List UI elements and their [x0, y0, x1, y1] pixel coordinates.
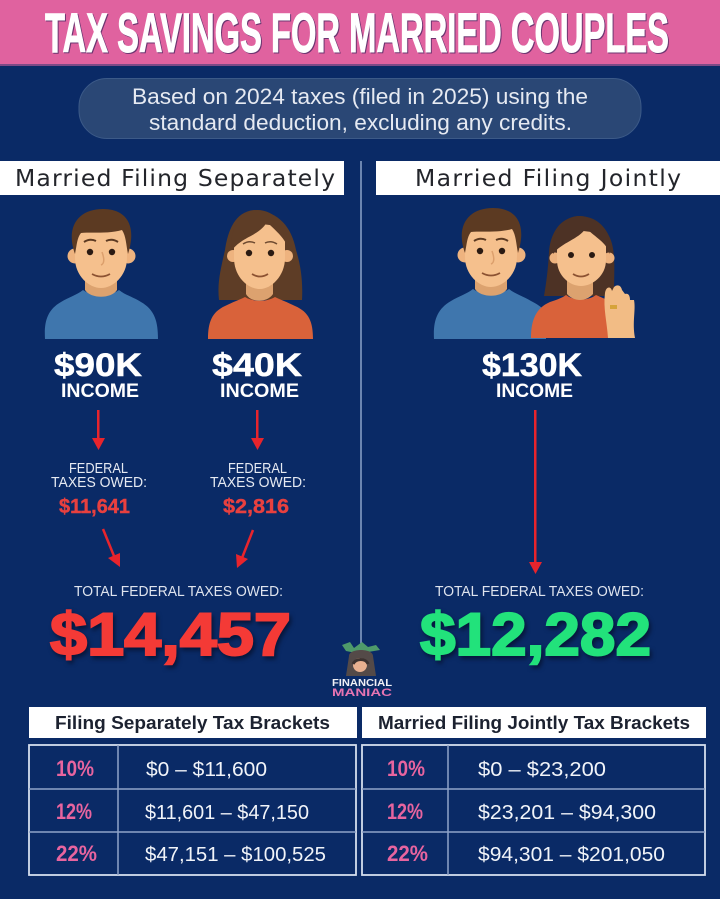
logo: financial maniac: FINANCIAL: [332, 677, 393, 689]
subtitle pill: Based on 2024 taxes (filed in 2025) using the: [132, 84, 588, 109]
table: separately brackets: 22%: [56, 841, 97, 866]
heading: married filing separately: Married Filing Separately: [15, 164, 335, 192]
logo: financial maniac: MANIAC: [332, 687, 392, 699]
heading: married filing jointly tax brackets: Married Filing Jointly Tax Brackets: [378, 712, 690, 733]
income: $40K: [212, 347, 302, 402]
arrow: woman tax to total: [236, 530, 253, 568]
federal taxes owed: $11,641: [51, 461, 147, 518]
table: jointly brackets: 10%: [387, 756, 425, 781]
federal taxes owed: $2,816: $2,816: [223, 496, 289, 518]
income: $40K: $40K: [212, 347, 302, 383]
table: separately brackets: $11,601 – $47,150: [145, 801, 309, 824]
table: separately brackets: $0 – $11,600: [146, 758, 267, 781]
federal taxes owed: $11,641: FEDERAL: [69, 461, 128, 477]
heading: married filing jointly: [376, 161, 720, 195]
table: separately brackets: [29, 745, 356, 875]
icon: couple: [434, 208, 635, 339]
arrow: woman income to tax: [251, 410, 264, 450]
icon: man: [45, 209, 158, 339]
table: jointly brackets: $23,201 – $94,300: [478, 801, 656, 824]
arrow: man tax to total: [103, 529, 120, 567]
arrow: joint income to total: [529, 410, 542, 574]
total taxes: separately: $14,457: [50, 601, 291, 668]
header banner: [0, 0, 720, 66]
table: jointly brackets: $0 – $23,200: [478, 758, 606, 781]
heading: filing separately tax brackets: Filing Separately Tax Brackets: [55, 712, 330, 733]
federal taxes owed: $11,641: TAXES OWED:: [51, 475, 147, 491]
federal taxes owed: $2,816: FEDERAL: [228, 461, 287, 477]
heading: married filing jointly: Married Filing Jointly: [415, 164, 681, 192]
table: separately brackets: 10%: [56, 756, 94, 781]
subtitle pill: [79, 78, 641, 138]
income: $130K: $130K: [482, 347, 582, 383]
table: jointly brackets: $94,301 – $201,050: [478, 843, 665, 866]
income: $90K: $90K: [54, 347, 142, 383]
heading: married filing jointly tax brackets: [362, 707, 706, 738]
income: $130K: [482, 347, 582, 402]
total taxes: separately: TOTAL FEDERAL TAXES OWED:: [74, 584, 283, 600]
income: $40K: INCOME: [220, 381, 299, 402]
income: $90K: [54, 347, 142, 402]
icon: woman: [208, 210, 313, 339]
heading: filing separately tax brackets: [29, 707, 357, 738]
table: jointly brackets: 22%: [387, 841, 428, 866]
federal taxes owed: $2,816: TAXES OWED:: [210, 475, 306, 491]
total taxes: jointly: $12,282: [420, 601, 651, 668]
table: separately brackets: $47,151 – $100,525: [145, 843, 326, 866]
arrow: man income to tax: [92, 410, 105, 450]
total taxes: jointly: TOTAL FEDERAL TAXES OWED:: [435, 584, 644, 600]
federal taxes owed: $11,641: $11,641: [59, 496, 130, 518]
table: jointly brackets: 12%: [387, 799, 423, 824]
income: $90K: INCOME: [61, 381, 139, 402]
income: $130K: INCOME: [496, 381, 573, 402]
federal taxes owed: $2,816: [210, 461, 306, 518]
subtitle pill: standard deduction, excluding any credits.: [149, 110, 572, 135]
table: jointly brackets: [362, 745, 705, 875]
table: separately brackets: 12%: [56, 799, 92, 824]
logo: financial maniac: [332, 642, 393, 699]
